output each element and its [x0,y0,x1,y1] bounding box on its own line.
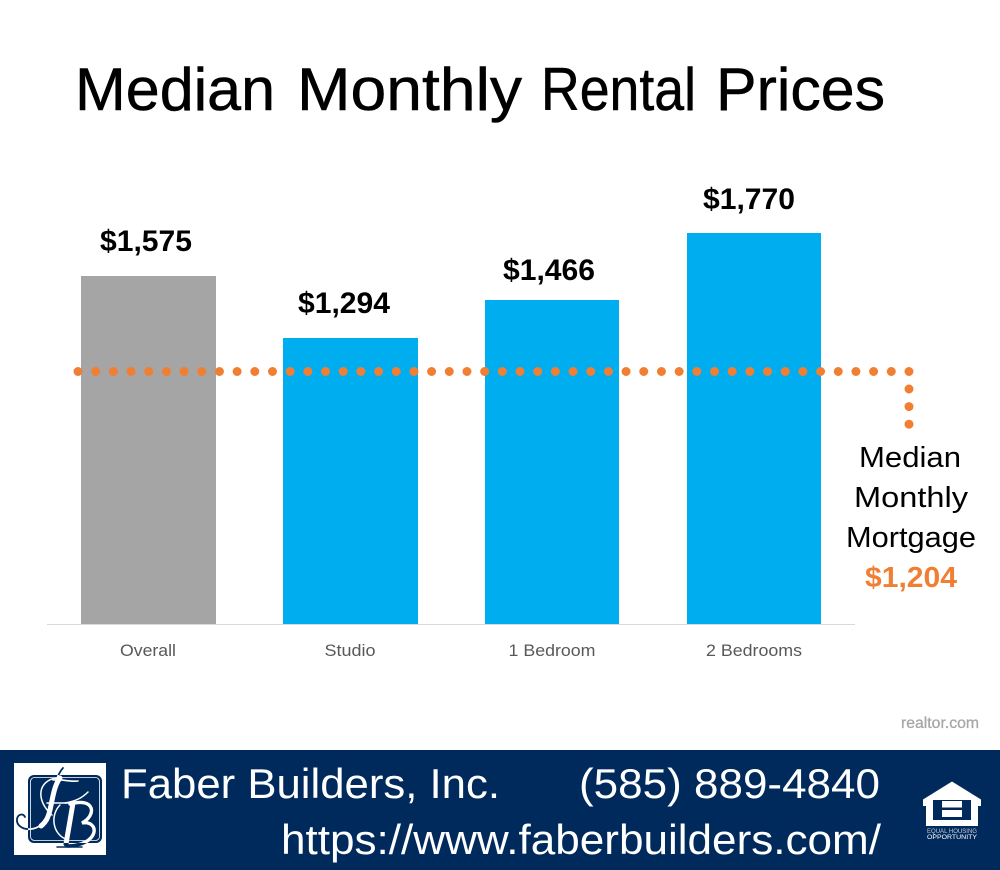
value label: overall: $1,575 [100,225,192,258]
bar chart: rental prices [47,183,855,660]
value label: studio: $1,294 [298,287,390,320]
value label: 2 bedrooms: $1,770 [703,183,795,216]
callout: median monthly mortgage: Mortgage [846,522,976,554]
axis label: studio: Studio [324,641,376,660]
footer band [0,750,1000,870]
title: Median [75,56,275,123]
callout: median monthly mortgage: Monthly [854,482,969,514]
title: Prices [716,56,885,123]
icon: equal housing opportunity: EQUAL HOUSING [927,828,977,835]
bar: studio [283,338,418,624]
value label: 1 bedroom: $1,466 [503,254,595,287]
bar: 1 bedroom [485,300,619,624]
website: https://www.faberbuilders.com/ [281,816,881,863]
icon: equal housing opportunity: OPPORTUNITY [927,834,978,841]
dotted line: median mortgage marker [78,372,909,425]
callout: median monthly mortgage: $1,204 [865,562,957,594]
axis label: 2 bedrooms: 2 Bedrooms [706,641,802,660]
icon: equal housing opportunity [923,782,981,841]
title: Rental [541,56,696,123]
axis label: 1 bedroom: 1 Bedroom [508,641,596,660]
bar: overall [81,276,216,624]
phone number: (585) 889-4840 [579,760,880,807]
axis label: overall: Overall [120,641,176,660]
callout: median monthly mortgage [846,442,976,594]
source: realtor.com [901,715,979,732]
callout: median monthly mortgage: Median [859,442,961,474]
bar: 2 bedrooms [687,233,821,624]
company name: Faber Builders, Inc. [121,760,500,807]
icon: Faber Builders logo [14,763,106,855]
title: Monthly [297,56,522,123]
